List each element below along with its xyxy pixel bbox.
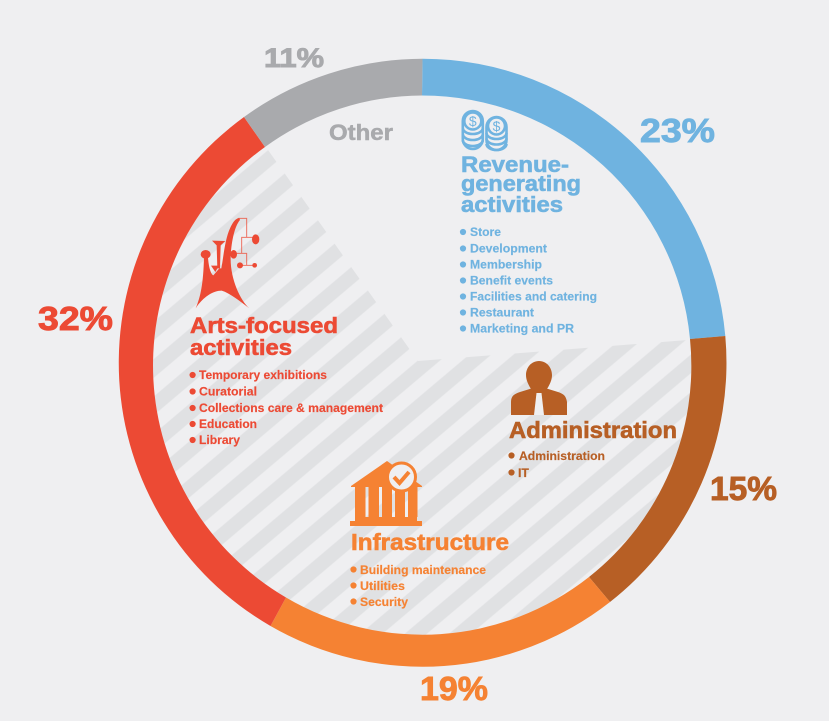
panel: revenue-generating activities [460,111,597,336]
list: revenue items: Benefit events [470,276,553,288]
list: infrastructure items [351,565,486,609]
list: arts items: Temporary exhibitions [199,370,327,382]
list: revenue items: Membership [470,260,542,272]
percentage: other 11%: 11% [264,43,324,73]
list: arts items: Library [199,435,241,447]
list: arts items: Collections care & management [199,403,383,415]
donut ring chart [119,59,726,667]
list: infrastructure items: Security [360,597,409,609]
percentage: infrastructure 19%: 19% [420,670,488,707]
panel: administration [509,361,677,480]
label: other: Other [329,120,393,145]
list: infrastructure items: Utilities [360,581,405,593]
icon: bank building with check [350,461,422,526]
list: revenue items: Store [470,227,501,239]
list: administration items: Administration [519,451,605,463]
heading: arts-focused activities [190,313,338,360]
panel: arts-focused activities [190,218,383,447]
list: revenue items [460,227,597,336]
ring segment: infrastructure 19% [270,577,610,667]
list: infrastructure items: Building maintenance [360,565,486,577]
heading: infrastructure: Infrastructure [351,529,509,555]
ring segment: arts 32% [119,117,286,626]
icon: mobile sculpture [196,218,259,308]
icon: coin stacks [463,111,506,150]
ring segment: administration 15% [589,336,726,602]
heading: revenue-generating activities: generating [461,171,581,196]
heading: revenue-generating activities: activities [461,192,563,217]
panel: infrastructure [350,461,509,609]
icon: coin stacks: $ [493,118,501,134]
list: arts items: Curatorial [199,386,257,398]
list: administration items: IT [518,468,529,480]
heading: arts-focused activities: activities [190,335,292,360]
icon: coin stacks: $ [469,113,477,129]
list: revenue items: Restaurant [470,308,534,320]
percentage: revenue 23%: 23% [640,112,715,149]
icon: person with tie [511,361,567,415]
list: revenue items: Marketing and PR [470,324,575,336]
list: revenue items: Facilities and catering [470,292,597,304]
list: administration items [509,451,605,480]
heading: revenue-generating activities [461,152,581,217]
heading: administration: Administration [509,417,677,443]
heading: revenue-generating activities: Revenue- [461,152,569,177]
ring segment: other 11% [244,59,422,147]
heading: arts-focused activities: Arts-focused [190,313,338,338]
percentage: arts 32%: 32% [38,300,113,337]
ring segment: revenue 23% [422,59,725,339]
list: arts items: Education [199,419,257,431]
list: arts items [190,370,383,447]
list: revenue items: Development [470,244,547,256]
percentage: administration 15%: 15% [710,470,777,507]
